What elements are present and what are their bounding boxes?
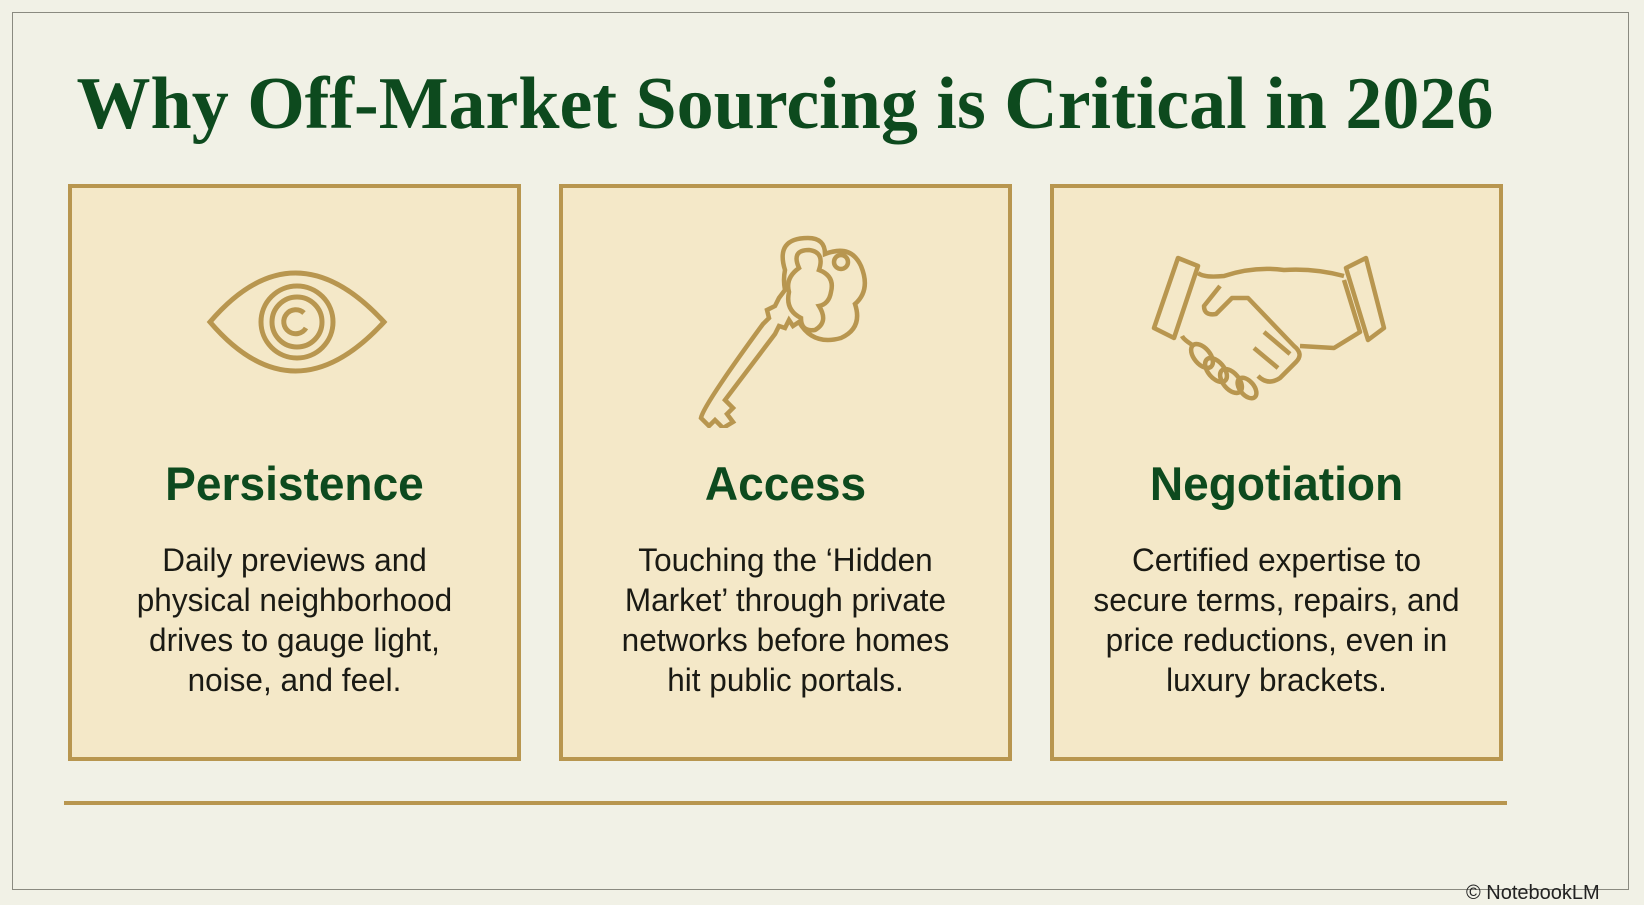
text: negotiation: [1093, 542, 1460, 698]
title: Why Off-Market Sourcing is Critical in 2026: [77, 63, 1493, 145]
text: negotiation: price reductions, even in: [1106, 622, 1447, 658]
icon: handshake: [1152, 256, 1386, 400]
icon: key: [698, 236, 868, 428]
text: access: [622, 542, 949, 698]
text: access: Touching the ‘Hidden: [638, 542, 933, 578]
text: persistence: Daily previews and: [162, 542, 427, 578]
heading: access: Access: [705, 457, 866, 510]
heading: negotiation: Negotiation: [1150, 457, 1403, 510]
panel: persistence: [68, 184, 521, 761]
text: access: hit public portals.: [667, 662, 904, 698]
icon: eye: [206, 270, 388, 374]
text: access: Market’ through private: [625, 582, 946, 618]
text: persistence: [137, 542, 452, 698]
text: negotiation: luxury brackets.: [1166, 662, 1387, 698]
text: negotiation: secure terms, repairs, and: [1093, 582, 1460, 618]
text: persistence: physical neighborhood: [137, 582, 452, 618]
panel: negotiation: [1050, 184, 1503, 761]
heading: persistence: Persistence: [165, 457, 424, 510]
text: negotiation: Certified expertise to: [1132, 542, 1421, 578]
copyright: © NotebookLM: [1466, 882, 1600, 904]
text: persistence: drives to gauge light,: [149, 622, 440, 658]
text: persistence: noise, and feel.: [188, 662, 401, 698]
panel: access: [559, 184, 1012, 761]
text: access: networks before homes: [622, 622, 949, 658]
